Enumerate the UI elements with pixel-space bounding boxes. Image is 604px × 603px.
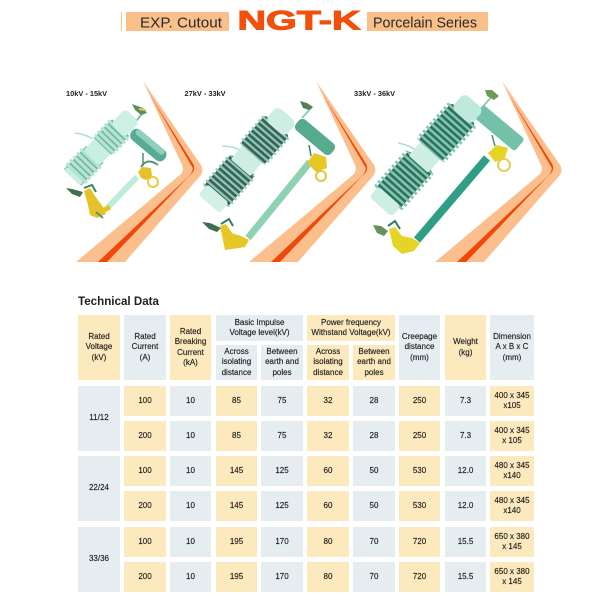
data row: 33/36, 200 A: 80 bbox=[324, 572, 332, 581]
data row: 11/12, 200 A: 32 bbox=[324, 431, 332, 440]
header: Dimension: A x B x C bbox=[496, 342, 528, 351]
header: Across isolating distance (impulse) bbox=[216, 345, 257, 380]
data row: 11/12, 100 A: 7.3 bbox=[460, 396, 471, 405]
group label: 11/12: 11/12 bbox=[89, 413, 109, 422]
data row: 33/36, 100 A: 10 bbox=[186, 537, 195, 546]
data row: 22/24, 100 A: 50 bbox=[370, 466, 378, 475]
header: Rated Voltage: (kV) bbox=[92, 353, 106, 362]
data row: 33/36, 200 A: 10 bbox=[186, 572, 195, 581]
data row: 22/24, 100 A: x140 bbox=[503, 471, 521, 480]
header: Rated Voltage bbox=[78, 315, 120, 380]
data row: 11/12, 200 A bbox=[124, 421, 534, 451]
header: Creepage distance: (mm) bbox=[410, 353, 429, 362]
data row: 22/24, 200 A: 530 bbox=[413, 501, 426, 510]
header: Creepage distance: Creepage bbox=[402, 332, 437, 341]
header: Weight bbox=[445, 315, 486, 380]
data row: 11/12, 200 A: 85 bbox=[232, 431, 241, 440]
chevron 3 bbox=[435, 81, 562, 262]
data row: 11/12, 100 A: x105 bbox=[503, 401, 521, 410]
data row: 11/12, 100 A: 32 bbox=[324, 396, 332, 405]
group label: 22/24: 22/24 bbox=[89, 483, 109, 492]
header: Basic Impulse Voltage level bbox=[216, 315, 303, 341]
data row: 22/24, 200 A: 60 bbox=[324, 501, 332, 510]
header: Between earth and poles (power) bbox=[353, 345, 395, 380]
data row: 11/12, 200 A: 7.3 bbox=[460, 431, 471, 440]
banner: Porcelain Series: Porcelain Series bbox=[373, 16, 477, 32]
header: Rated Breaking Current: Rated bbox=[180, 327, 201, 336]
banner: EXP. Cutout bbox=[126, 12, 229, 32]
header: Creepage distance: distance bbox=[405, 342, 434, 351]
data row: 33/36, 200 A bbox=[124, 562, 534, 592]
header: Across isolating distance (impulse): isolating bbox=[222, 357, 251, 366]
data row: 22/24, 100 A bbox=[124, 456, 534, 486]
cutout 2: 27kV-33kV bbox=[195, 101, 337, 250]
header: Basic Impulse Voltage level: Basic Impulse bbox=[235, 318, 284, 327]
label: 33kV - 36kV: 33kV - 36kV bbox=[354, 89, 395, 98]
header: Between earth and poles (impulse) bbox=[261, 345, 303, 380]
header: Between earth and poles (impulse): poles bbox=[272, 368, 292, 377]
data row: 33/36, 100 A bbox=[124, 527, 534, 557]
header: Rated Current: (A) bbox=[140, 353, 150, 362]
header: Rated Breaking Current: Current bbox=[177, 348, 204, 356]
data row: 11/12, 200 A: 400 x 345 bbox=[494, 426, 530, 435]
header: Across isolating distance (power) bbox=[307, 345, 349, 380]
group label: 11/12 bbox=[78, 386, 120, 451]
table header row bbox=[78, 315, 534, 380]
data row: 22/24, 200 A: 200 bbox=[138, 501, 152, 510]
data row: 33/36, 200 A: 70 bbox=[370, 572, 378, 581]
data row: 33/36, 200 A: 200 bbox=[138, 572, 152, 581]
data row: 11/12, 200 A: 200 bbox=[138, 431, 152, 440]
data row: 11/12, 200 A: 250 bbox=[413, 431, 426, 440]
header: Weight: (kg) bbox=[459, 348, 472, 356]
data row: 11/12, 100 A: 28 bbox=[370, 396, 378, 405]
data row: 33/36, 100 A: 650 x 380 bbox=[494, 532, 530, 541]
group label: 33/36: 33/36 bbox=[89, 554, 109, 563]
data row: 33/36, 100 A: 720 bbox=[413, 537, 426, 546]
data row: 33/36, 200 A: 720 bbox=[413, 572, 426, 581]
data row: 11/12, 100 A: 75 bbox=[278, 396, 286, 405]
data row: 22/24, 200 A: x140 bbox=[503, 506, 521, 515]
header: Weight: Weight bbox=[453, 337, 478, 346]
data row: 22/24, 100 A: 480 x 345 bbox=[494, 461, 530, 470]
table: technical data bbox=[78, 315, 534, 592]
header: Between earth and poles (power): poles bbox=[364, 368, 384, 377]
header: Across isolating distance (power): distance bbox=[313, 368, 343, 377]
data row: 22/24, 100 A: 530 bbox=[413, 466, 426, 475]
data row: 22/24, 200 A: 10 bbox=[186, 501, 195, 510]
header: Rated Breaking Current bbox=[170, 315, 211, 380]
header: Rated Current bbox=[124, 315, 166, 380]
header: Power frequency Withstand Voltage: Power frequency bbox=[321, 318, 381, 327]
data row: 33/36, 100 A: 70 bbox=[370, 537, 378, 546]
data row: 22/24, 200 A: 125 bbox=[275, 501, 289, 510]
logo: NGT-K: NGT-K bbox=[238, 6, 360, 36]
data row: 22/24, 100 A: 60 bbox=[324, 466, 332, 475]
label: 27kV - 33kV: 27kV - 33kV bbox=[184, 89, 226, 98]
heading: Technical Data: Technical Data bbox=[78, 295, 159, 308]
data row: 33/36, 100 A: 170 bbox=[275, 537, 289, 546]
data row: 22/24, 100 A: 125 bbox=[275, 466, 289, 475]
cutout 1: 10kV-15kV bbox=[62, 104, 169, 218]
data row: 11/12, 200 A: x 105 bbox=[502, 436, 522, 445]
header: Between earth and poles (power): earth and bbox=[357, 357, 391, 366]
header: Rated Breaking Current: (kA) bbox=[183, 358, 198, 367]
data row: 33/36, 200 A: x 145 bbox=[502, 577, 522, 586]
data row: 22/24, 200 A: 145 bbox=[230, 501, 243, 510]
group label: 22/24 bbox=[78, 456, 120, 521]
header: Across isolating distance (impulse): Across bbox=[224, 347, 249, 356]
chevron 1 bbox=[76, 81, 202, 262]
header: Rated Current: Current bbox=[132, 342, 158, 351]
header: Across isolating distance (power): isolating bbox=[313, 357, 343, 366]
data row: 22/24, 100 A: 100 bbox=[138, 466, 152, 475]
group label: 33/36 bbox=[78, 527, 120, 592]
data row: 11/12, 100 A bbox=[124, 386, 534, 416]
data row: 33/36, 200 A: 170 bbox=[275, 572, 289, 581]
data row: 22/24, 200 A: 12.0 bbox=[458, 501, 473, 510]
header: Between earth and poles (impulse): earth and bbox=[265, 357, 299, 366]
data row: 11/12, 200 A: 75 bbox=[278, 431, 286, 440]
header: Across isolating distance (impulse): distance bbox=[222, 368, 251, 377]
data row: 22/24, 200 A: 50 bbox=[370, 501, 378, 510]
label: 10kV - 15kV: 10kV - 15kV bbox=[66, 89, 107, 98]
data row: 33/36, 100 A: 195 bbox=[230, 537, 243, 546]
data row: 11/12, 100 A: 250 bbox=[413, 396, 426, 405]
header: Dimension: (mm) bbox=[503, 353, 521, 362]
data row: 11/12, 100 A: 400 x 345 bbox=[494, 391, 530, 400]
data row: 11/12, 100 A: 85 bbox=[232, 396, 241, 405]
header: Across isolating distance (power): Across bbox=[316, 347, 340, 356]
data row: 33/36, 200 A: 195 bbox=[230, 572, 243, 581]
header: Rated Current: Rated bbox=[134, 332, 156, 341]
data row: 33/36, 100 A: 100 bbox=[138, 537, 152, 546]
banner: EXP. Cutout: EXP. Cutout bbox=[140, 16, 222, 32]
data row: 33/36, 200 A: 650 x 380 bbox=[494, 567, 530, 576]
data row: 33/36, 100 A: 80 bbox=[324, 537, 332, 546]
header: Rated Voltage: Rated bbox=[88, 332, 110, 341]
data row: 11/12, 200 A: 10 bbox=[186, 431, 195, 440]
data row: 11/12, 200 A: 28 bbox=[370, 431, 378, 440]
data row: 22/24, 200 A: 480 x 345 bbox=[494, 496, 530, 505]
data row: 33/36, 100 A: x 145 bbox=[502, 542, 522, 551]
header: title banner bbox=[121, 6, 488, 36]
header: Creepage distance bbox=[399, 315, 440, 380]
header: Rated Breaking Current: Breaking bbox=[175, 337, 206, 346]
data row: 11/12, 100 A: 100 bbox=[138, 396, 152, 405]
data row: 22/24, 200 A bbox=[124, 491, 534, 521]
header: Power frequency Withstand Voltage: Withstand Voltage(kV) bbox=[311, 328, 391, 337]
header: Dimension: Dimension bbox=[493, 332, 531, 341]
data row: 33/36, 100 A: 15.5 bbox=[458, 537, 473, 546]
data row: 22/24, 100 A: 12.0 bbox=[458, 466, 473, 475]
data row: 22/24, 100 A: 10 bbox=[186, 466, 195, 475]
header: Between earth and poles (impulse): Between bbox=[266, 347, 298, 356]
data row: 11/12, 100 A: 10 bbox=[186, 396, 195, 405]
header: Between earth and poles (power): Between bbox=[358, 347, 390, 356]
header: Rated Voltage: Voltage bbox=[86, 342, 112, 351]
header: Power frequency Withstand Voltage bbox=[307, 315, 395, 341]
data row: 33/36, 200 A: 15.5 bbox=[458, 572, 473, 581]
data row: 22/24, 100 A: 145 bbox=[230, 466, 243, 475]
header: Dimension bbox=[490, 315, 534, 380]
header: Basic Impulse Voltage level: Voltage level(kV) bbox=[229, 328, 290, 337]
chevron 2 bbox=[249, 81, 376, 262]
cutout 3: 33kV-36kV bbox=[366, 89, 525, 254]
